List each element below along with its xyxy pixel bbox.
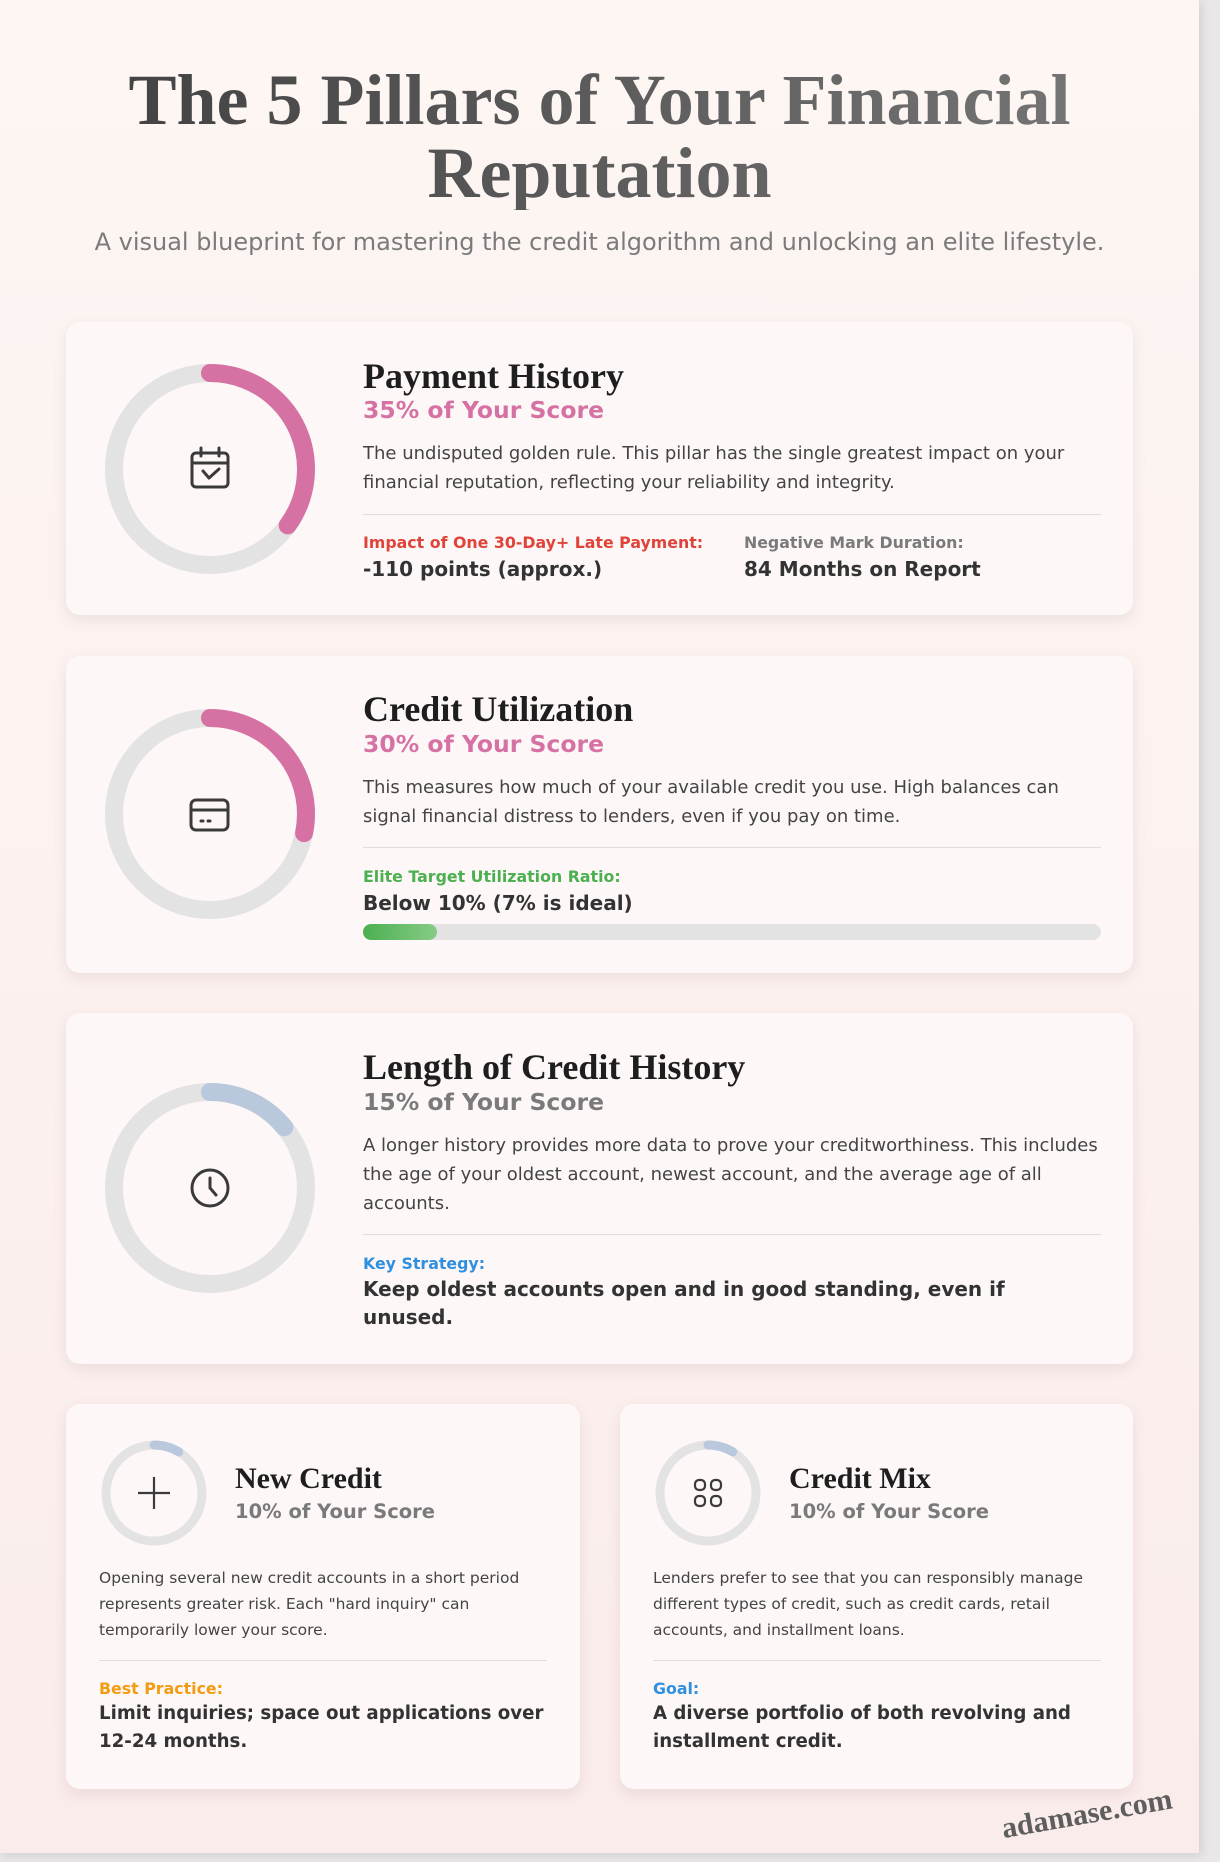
icon: plus (138, 1477, 170, 1509)
ring chart 15% (105, 1083, 315, 1293)
description: A longer history provides more data to prove your creditworthiness. This includes the age of your oldest account, newest account, and the average age of all accounts. (363, 1135, 1098, 1214)
percentage: 35% of Your Score (363, 396, 604, 424)
ring chart 30% (105, 709, 315, 919)
percentage: 10% of Your Score (789, 1500, 989, 1523)
icon: grid (695, 1480, 721, 1506)
ring chart 10% (102, 1440, 206, 1546)
heading: Length of Credit History (363, 1047, 745, 1087)
icon: card (191, 800, 228, 830)
title: The 5 Pillars of Your Financial (128, 60, 1071, 140)
goal: Goal: (653, 1679, 699, 1698)
ring chart 10% (656, 1440, 760, 1546)
percentage: 15% of Your Score (363, 1088, 604, 1116)
stat: duration: Negative Mark Duration: (744, 533, 964, 552)
best practice: Best Practice: (99, 1679, 223, 1698)
panel: new credit: Limit inquiries; space out applications over 12-24 months. (99, 1703, 543, 1752)
panel: new credit (66, 1404, 580, 1789)
stat: target: Elite Target Utilization Ratio: (363, 867, 621, 886)
panel: credit mix: A diverse portfolio of both revolving and installment credit. (653, 1703, 1071, 1752)
panel: length of credit history: Keep oldest accounts open and in good standing, even if unused. (363, 1277, 1005, 1329)
percentage: 30% of Your Score (363, 730, 604, 758)
heading: Payment History (363, 356, 624, 396)
progress bar (363, 924, 1101, 940)
panel: credit mix (620, 1404, 1133, 1789)
panel: payment history: 84 Months on Report (744, 557, 981, 581)
percentage: 10% of Your Score (235, 1500, 435, 1523)
ring chart 35% (105, 364, 315, 574)
stat: late payment: Impact of One 30-Day+ Late Payment: (363, 533, 703, 552)
title (0, 64, 1199, 210)
panel: credit utilization: Below 10% (7% is ideal) (363, 891, 633, 915)
description: The undisputed golden rule. This pillar has the single greatest impact on your financial reputation, reflecting your reliability and integrity. (363, 443, 1064, 493)
description: This measures how much of your available credit you use. High balances can signal financial distress to lenders, even if you pay on time. (363, 777, 1059, 827)
panel: payment history (66, 322, 1133, 615)
heading: New Credit (235, 1462, 382, 1495)
key strategy: Key Strategy: (363, 1254, 485, 1273)
panel: payment history: -110 points (approx.) (363, 557, 602, 581)
subtitle: A visual blueprint for mastering the credit algorithm and unlocking an elite lifestyle. (95, 228, 1104, 256)
description: Opening several new credit accounts in a short period represents greater risk. Each "hard inquiry" can temporarily lower your score. (99, 1569, 519, 1639)
icon: clock (192, 1170, 228, 1206)
heading: Credit Mix (789, 1462, 931, 1495)
description: Lenders prefer to see that you can responsibly manage different types of credit, such as credit cards, retail accounts, and installment loans. (653, 1569, 1083, 1639)
panel: credit utilization (66, 656, 1133, 973)
watermark: adamase.com (999, 1783, 1175, 1845)
icon: calendar check (192, 448, 228, 487)
panel: length of credit history (66, 1013, 1133, 1364)
title: Reputation (427, 133, 772, 213)
heading: Credit Utilization (363, 689, 633, 729)
